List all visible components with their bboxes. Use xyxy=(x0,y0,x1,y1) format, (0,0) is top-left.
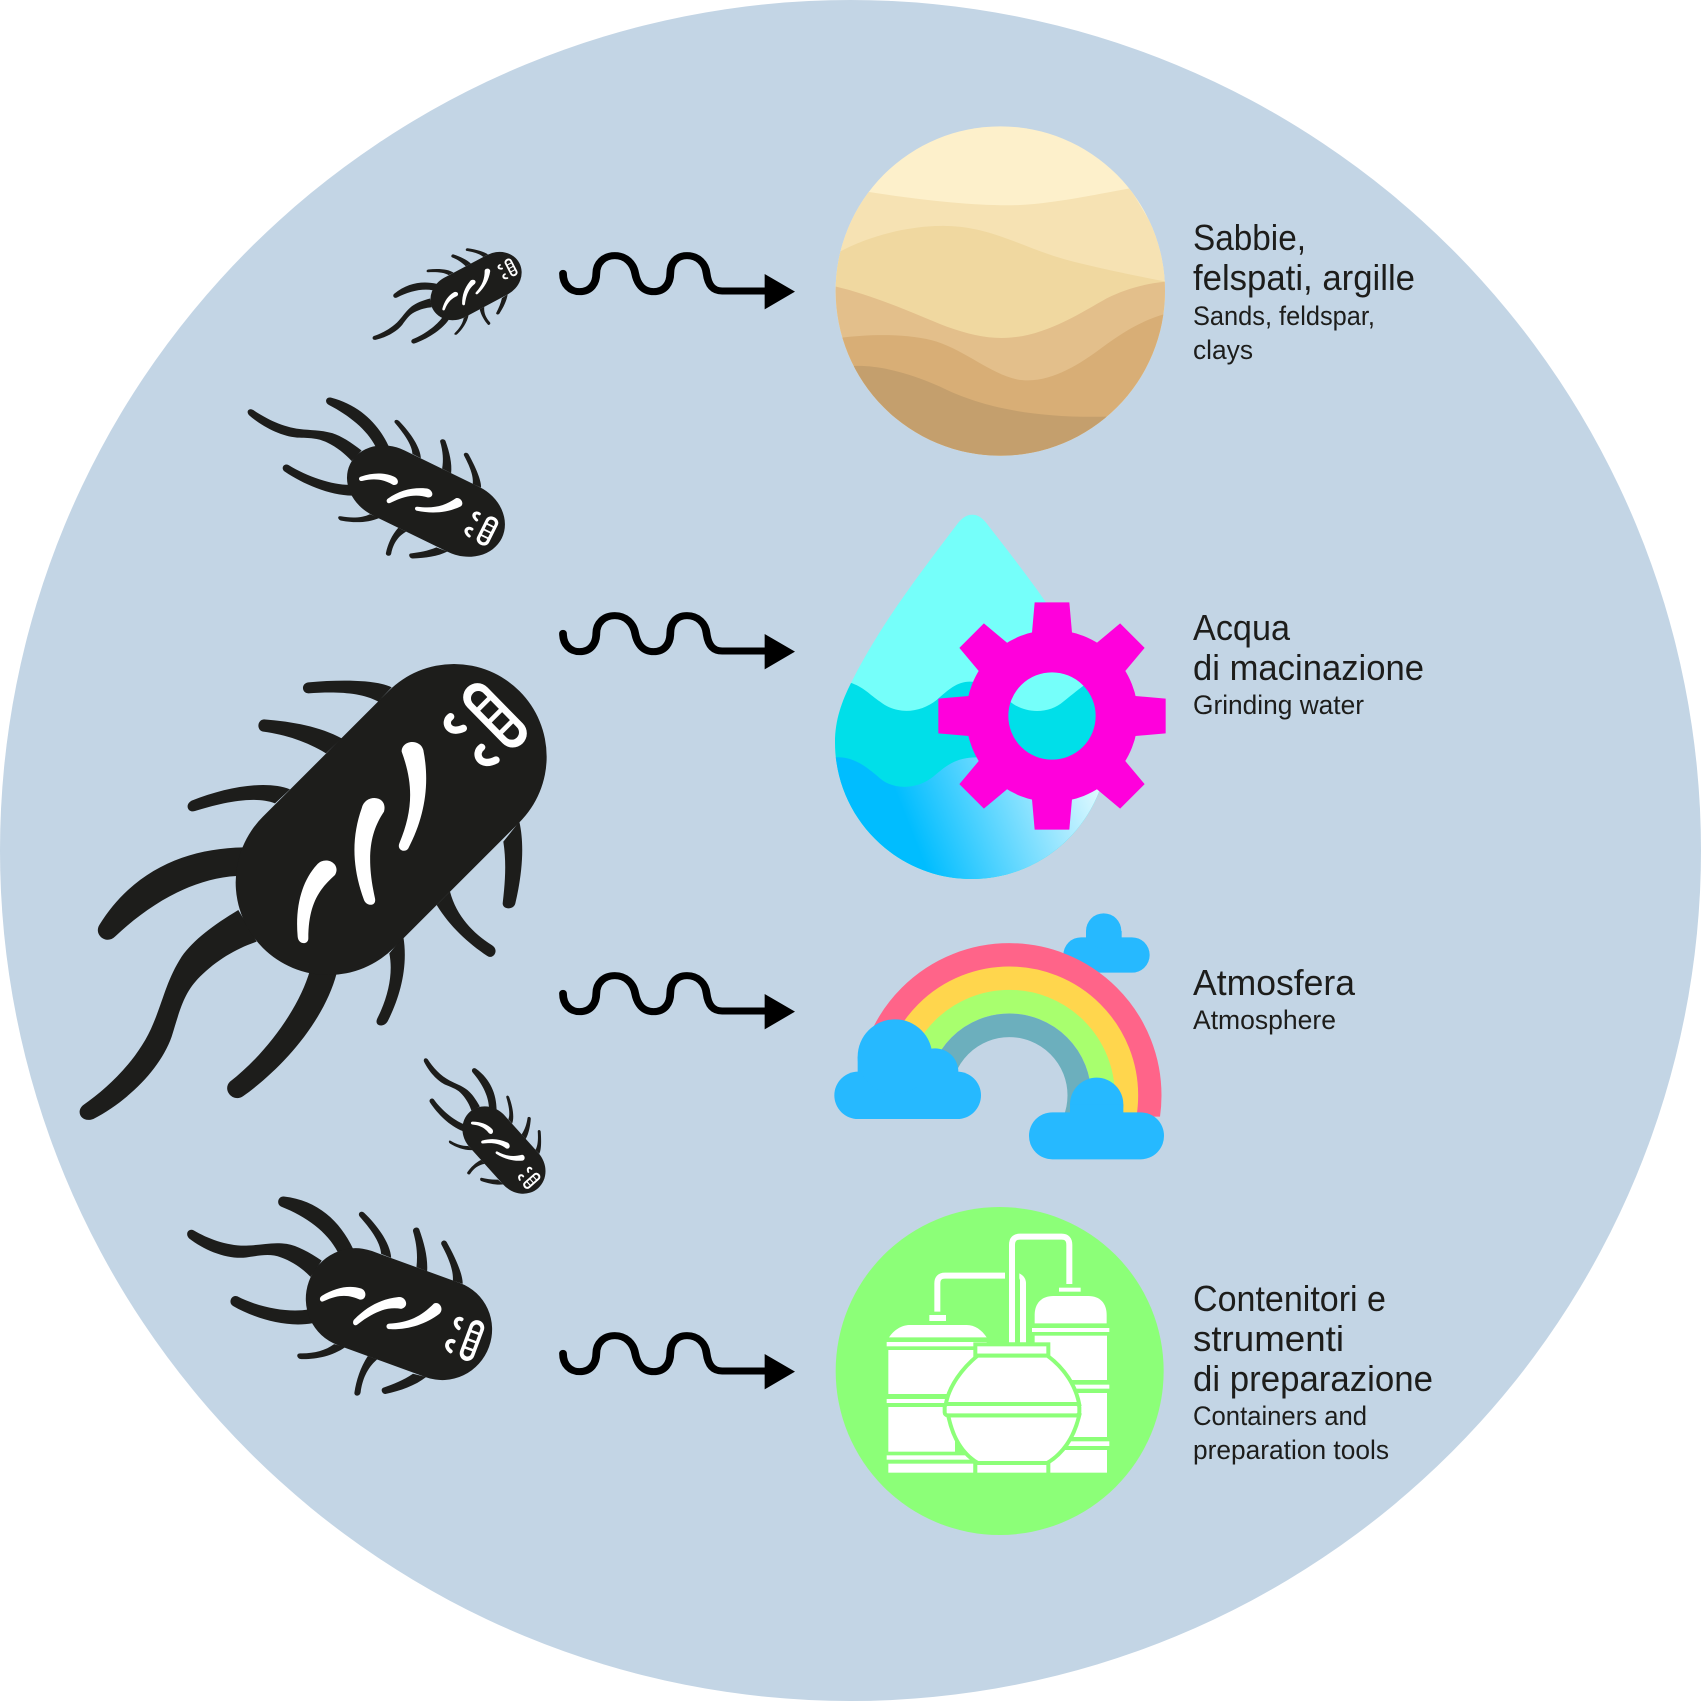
icon: sand dunes globe xyxy=(836,126,1165,456)
text block: sands english: clays xyxy=(1193,335,1253,365)
arrow: wavy arrow to water xyxy=(563,616,795,669)
text block: sands english: Sands, feldspar, xyxy=(1193,301,1375,331)
icon: medium bug upper xyxy=(246,365,507,584)
text block: containers english: preparation tools xyxy=(1193,1435,1389,1465)
icon: small bug top xyxy=(372,234,521,366)
text block: sands xyxy=(1193,217,1415,298)
text block: atmosphere: Atmosfera xyxy=(1193,962,1356,1003)
text block: atmosphere english: Atmosphere xyxy=(1193,1005,1336,1035)
text block: sands: felspati, argille xyxy=(1193,257,1415,298)
arrow: wavy arrow to atmosphere xyxy=(563,976,795,1029)
text block: containers: Contenitori e xyxy=(1193,1278,1386,1319)
icon: medium bug lower xyxy=(186,1130,495,1447)
text block: containers english xyxy=(1193,1401,1389,1465)
arrow: wavy arrow to containers xyxy=(563,1336,795,1389)
text block: containers: strumenti xyxy=(1193,1318,1344,1359)
text block: containers english: Containers and xyxy=(1193,1401,1367,1431)
text block: water: di macinazione xyxy=(1193,647,1424,688)
icon: green circle with tanks xyxy=(836,1207,1164,1535)
icon: magenta gear xyxy=(938,602,1166,830)
text block: water: Acqua xyxy=(1193,607,1291,648)
icon: small bug lower xyxy=(424,1058,541,1189)
text block: sands: Sabbie, xyxy=(1193,217,1306,258)
text block: water xyxy=(1193,607,1424,688)
arrow: wavy arrow to sands xyxy=(563,256,795,309)
icon: large bug xyxy=(80,681,522,1120)
text block: containers xyxy=(1193,1278,1433,1399)
text block: sands english xyxy=(1193,301,1375,365)
text block: water english: Grinding water xyxy=(1193,690,1364,720)
icon: rainbow with clouds xyxy=(834,913,1164,1160)
icon: water drop with gear xyxy=(835,514,1166,879)
text block: containers: di preparazione xyxy=(1193,1358,1433,1399)
